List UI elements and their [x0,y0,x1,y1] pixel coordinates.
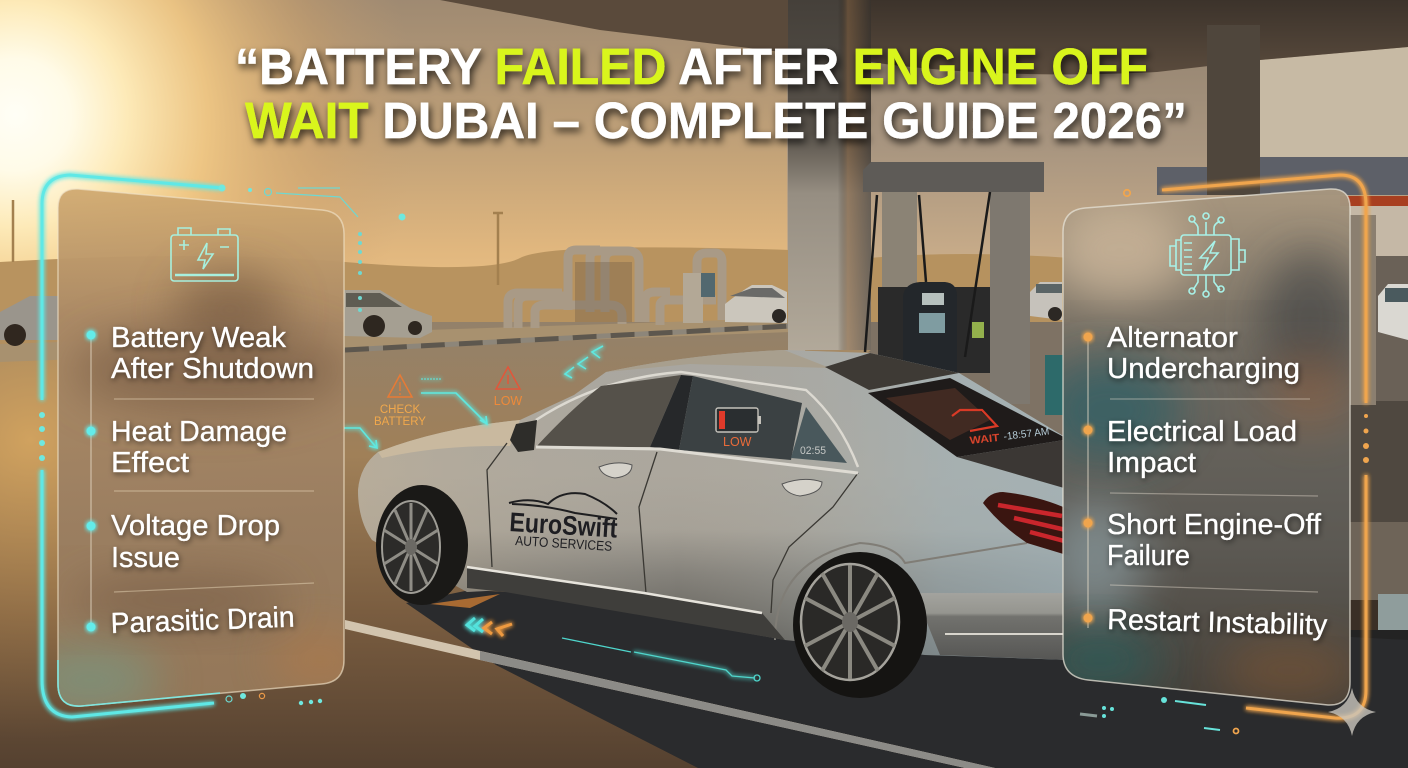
hud arrows [344,346,603,448]
tail light [983,492,1070,556]
title [235,38,1187,149]
warning: low [494,367,522,408]
list item: heat damage [111,416,287,479]
list item: electrical load: Impact [1107,447,1196,479]
background car left [0,296,60,346]
dunes [0,247,790,340]
list item: battery weak: After Shutdown [111,353,314,385]
handles [599,463,632,478]
light poles [13,200,503,285]
rear bumper [915,593,1070,660]
list item: short engine-off [1107,509,1322,572]
window battery icon [716,408,761,449]
list item: voltage drop: Issue [111,542,180,574]
door lines [487,443,858,613]
chrome strip [467,567,762,613]
timeline spine [1087,336,1089,628]
left frame dots [39,184,406,705]
left neon frame [42,175,222,717]
window chrome [536,372,858,467]
right hud marks [1102,697,1167,718]
roof highlight [606,350,830,372]
hud circuit top [226,188,358,702]
logo: EuroSwift [509,507,618,544]
quarter window [791,407,847,463]
bullets [1084,332,1092,622]
right neon frame [1162,175,1366,718]
front wheel [376,485,468,605]
hud circuit on road [562,638,760,681]
list item: heat damage: Effect [111,447,189,479]
list item: alternator: Alternator [1107,322,1238,354]
list item: electrical load: Electrical Load [1107,416,1297,448]
car body [358,350,1070,660]
right glass [1063,189,1350,705]
icon: battery [171,228,238,281]
pillars [1207,25,1260,195]
trunk lid [957,440,1064,488]
mirror [510,420,537,452]
list item: parasitic drain: Parasitic Drain [110,602,295,640]
rear window [679,376,802,460]
front window [536,375,681,447]
pillar [650,375,693,450]
logo [509,493,618,554]
list item: alternator [1107,322,1300,385]
warning: check battery: CHECK [380,404,420,416]
window battery icon: LOW [723,435,752,449]
rear windshield [868,378,1064,457]
panel: right [1040,175,1369,734]
sill [467,567,785,640]
car shadow [406,590,1408,768]
title: WAIT DUBAI – COMPLETE GUIDE 2026” [245,92,1187,149]
ground [0,322,1408,768]
logo: AUTO SERVICES [515,533,613,554]
car [358,350,1070,698]
rear display: WAIT [969,432,1001,447]
list item: alternator: Undercharging [1107,353,1300,385]
dividers [1110,399,1318,592]
cream wall right [1260,47,1408,165]
icon: alternator [1170,213,1245,297]
list item: battery weak: Battery Weak [111,322,286,354]
list item: short engine-off: Short Engine-Off [1107,509,1322,541]
dividers [114,399,314,592]
left glass [58,189,344,706]
panel: left [20,175,406,717]
background car right [1030,282,1062,321]
hud small dots [358,232,362,312]
rear wheel [793,552,927,698]
timeline spine [90,336,92,626]
rear display: -18:57 AM [1003,425,1050,443]
hud chevrons on road [467,618,512,636]
list item: short engine-off: Failure [1107,540,1190,572]
distant building [1157,157,1408,405]
bullets [86,330,96,632]
warning: low: LOW [494,394,522,408]
warning: check battery: BATTERY [374,416,426,428]
right frame dots [1363,414,1369,463]
hood highlight [378,420,520,458]
list item: voltage drop [111,510,280,574]
road stripe [345,620,995,768]
wheel arch [775,543,1027,640]
pipes [508,250,722,328]
canopy roof [440,0,1408,74]
list item: heat damage: Heat Damage [111,416,287,448]
dark roof [825,353,959,390]
fuel pump [863,162,1063,415]
list item: electrical load [1107,416,1297,479]
list item: battery weak [111,322,314,385]
warning: check battery [374,375,426,428]
icon: sparkle watermark [1328,688,1376,736]
rear display [952,410,1050,447]
list item: restart: Restart Instability [1107,604,1328,642]
list item: voltage drop: Voltage Drop [111,510,280,542]
background car near panel [344,290,432,338]
tiles right [1350,522,1408,600]
background car centre [725,285,787,323]
right roadway [870,322,1408,522]
title: “BATTERY FAILED AFTER ENGINE OFF [235,38,1148,95]
clock readout: 02:55 [800,445,826,457]
